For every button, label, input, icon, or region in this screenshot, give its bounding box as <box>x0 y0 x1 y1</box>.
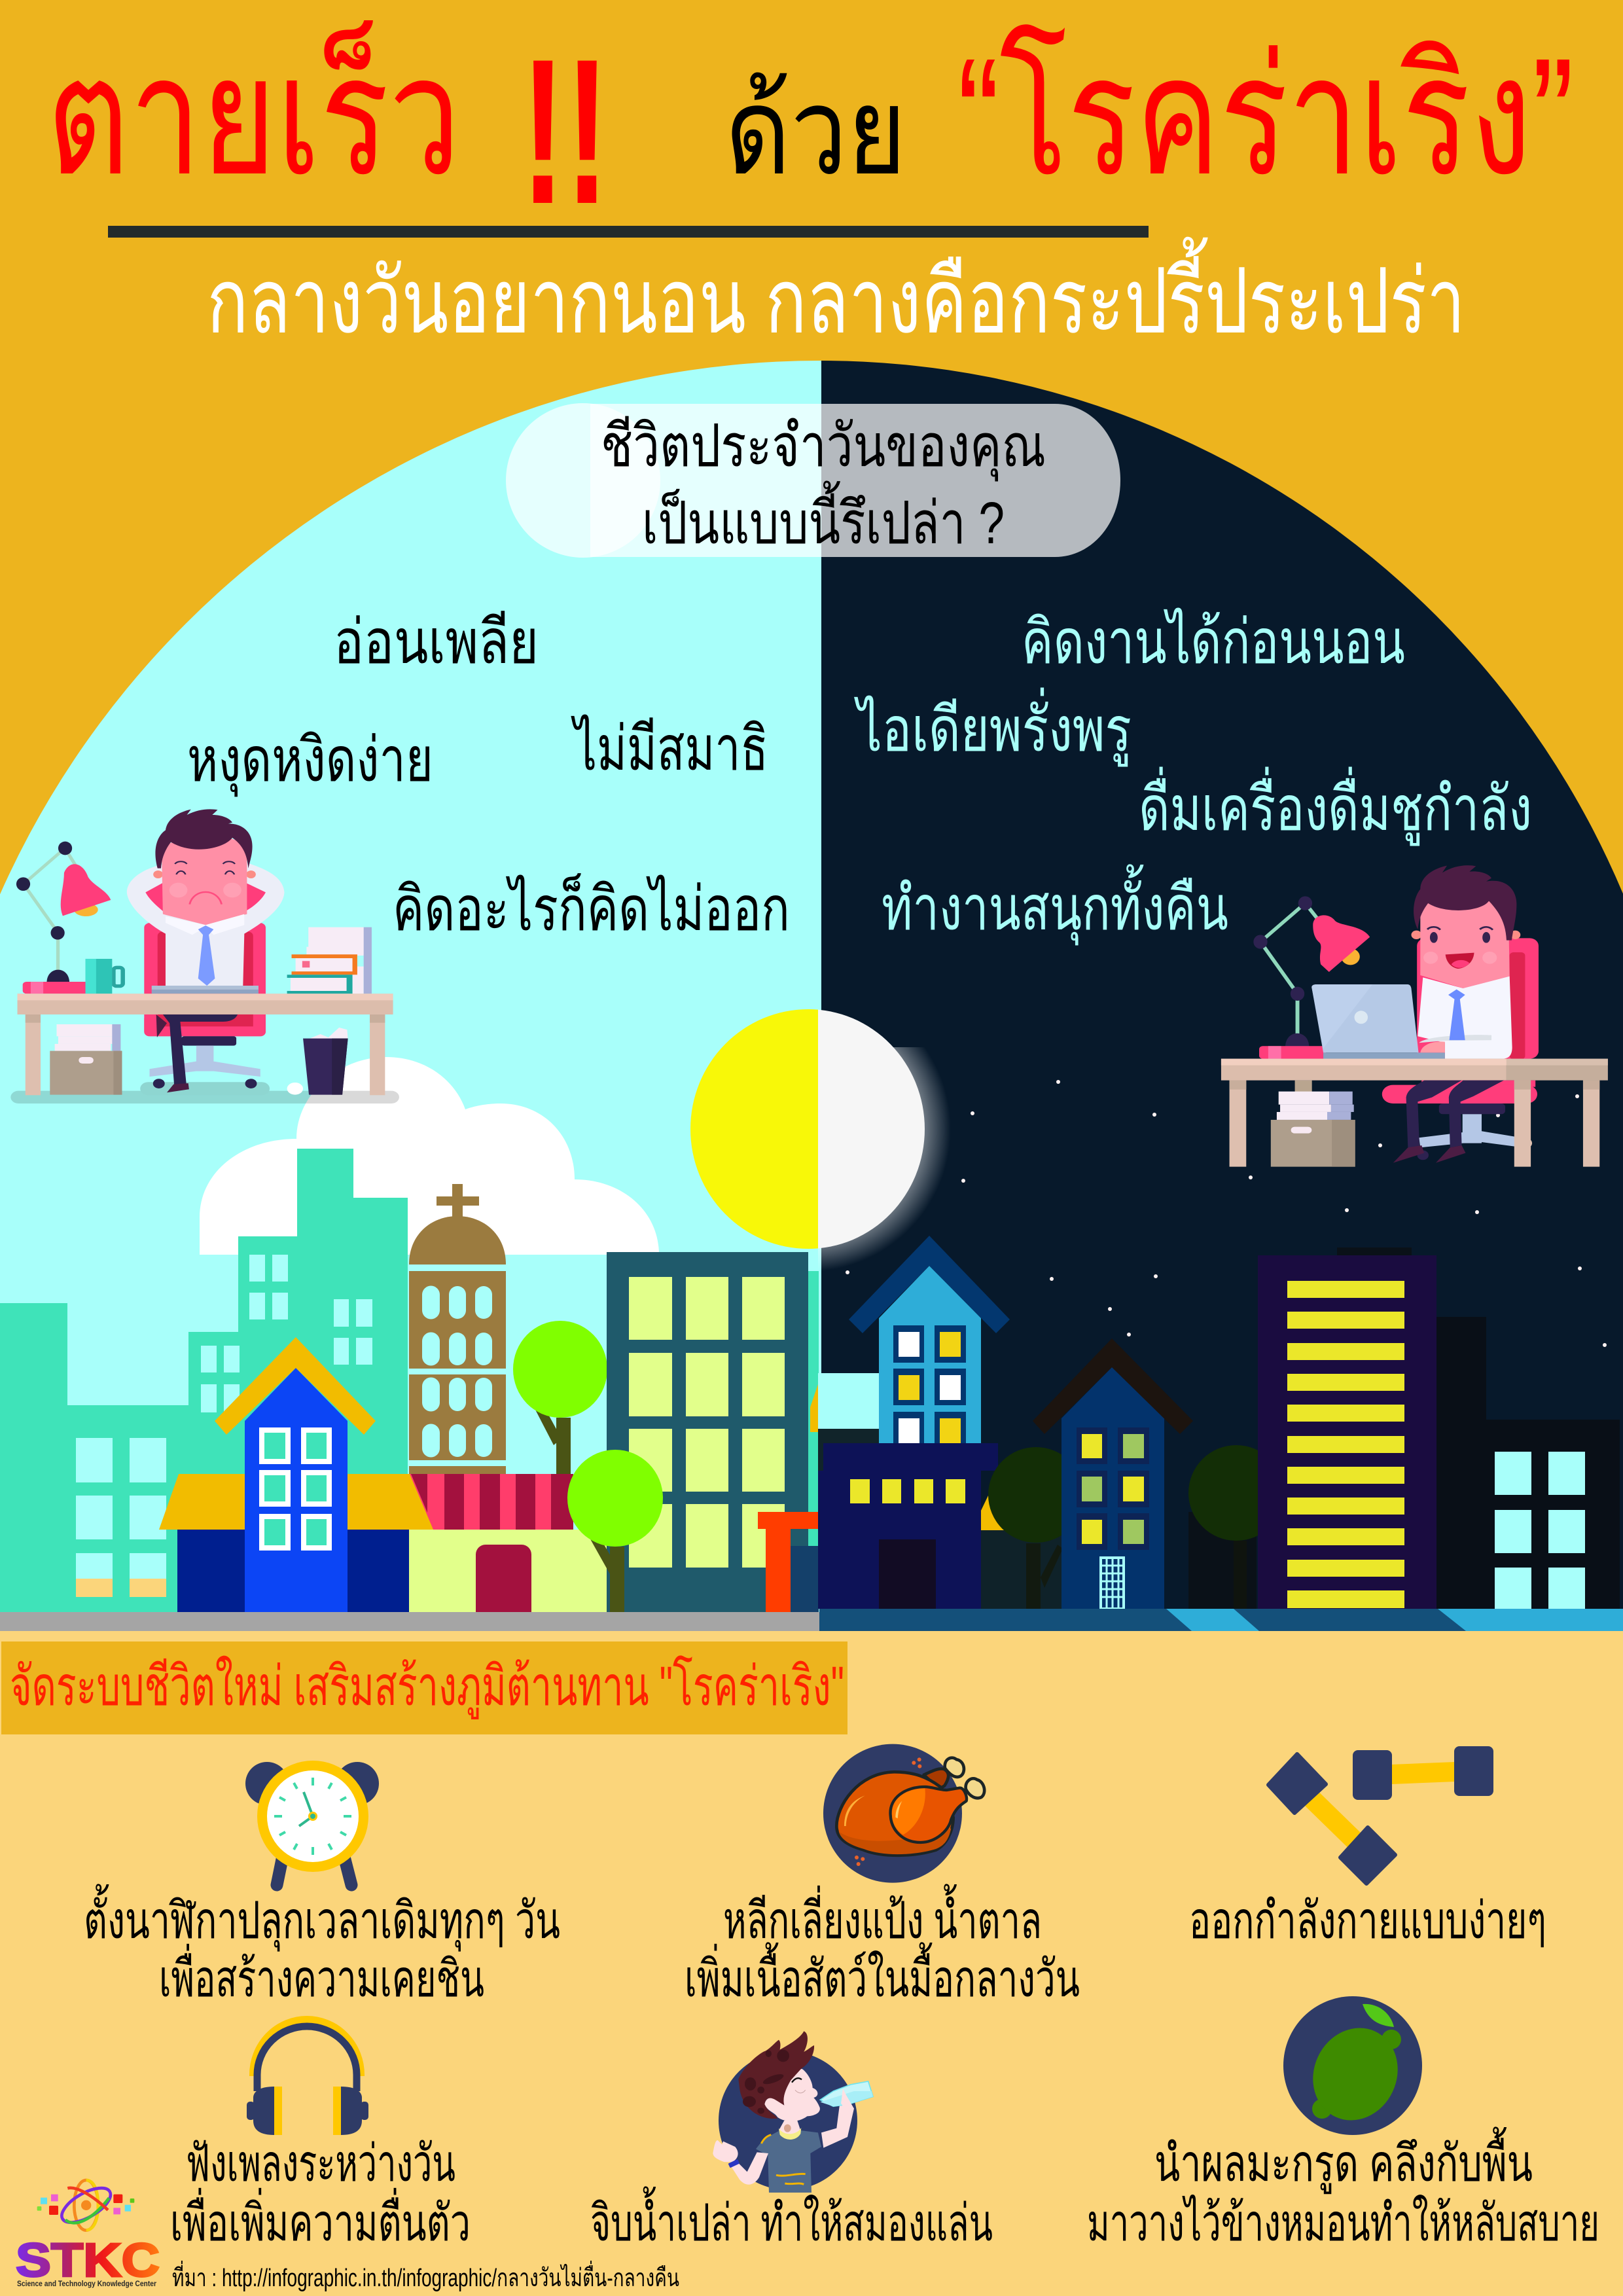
text: alarm tip <box>84 1884 560 2007</box>
books and papers <box>287 927 372 994</box>
day symptoms text: คิดอะไรก็คิดไม่ออก <box>393 872 790 943</box>
heading text: solutions: จัดระบบชีวิตใหม่ เสริมสร้างภูมิต้านทาน "โรคร่าเริง" <box>10 1655 844 1719</box>
background: bottom pale yellow <box>0 1631 1623 2296</box>
title: ด้วย <box>725 65 906 200</box>
pill text <box>601 414 1046 556</box>
night symptoms text: คิดงานได้ก่อนนอน <box>1022 607 1405 676</box>
logo: STKC <box>16 2180 160 2288</box>
source line: ที่มา : http://infographic.in.th/infographic/กลางวันไม่ตื่น-กลางคืน <box>172 2261 679 2292</box>
tall block <box>1436 1317 1620 1609</box>
illustration: tired man at desk <box>10 809 399 1103</box>
icon: sun <box>690 1009 818 1249</box>
teal skyline <box>0 1149 408 1612</box>
night tree <box>988 1447 1084 1609</box>
mug <box>86 959 123 994</box>
icon: cloud <box>200 1057 659 1255</box>
desk lamp <box>16 842 111 994</box>
day symptoms text: อ่อนเพลีย <box>334 607 539 676</box>
background gap <box>818 1373 879 1429</box>
background: top orange <box>0 0 1623 1631</box>
day symptoms text <box>187 607 790 943</box>
blue house <box>159 1337 433 1612</box>
yellow striped tower <box>1258 1247 1436 1609</box>
text: alarm tip: เพื่อสร้างความเคยชิน <box>159 1944 484 2007</box>
title: !! <box>521 16 609 247</box>
title <box>46 16 1574 247</box>
desk <box>18 994 393 1095</box>
icon: dumbbells <box>1268 1746 1493 1884</box>
night symptoms text: ไอเดียพรั่งพรู <box>853 687 1132 767</box>
text: music tip: เพื่อเพิ่มความตื่นตัว <box>170 2188 471 2251</box>
pill text: ชีวิตประจำวันของคุณ <box>601 414 1046 482</box>
night stars <box>846 1080 1607 1347</box>
icon: kaffir lime <box>1283 1996 1422 2135</box>
shop <box>409 1474 607 1612</box>
trash bin <box>287 1028 348 1095</box>
title: ตายเร็ว <box>46 20 461 209</box>
church <box>409 1184 506 1474</box>
night tree <box>1188 1445 1284 1609</box>
text: lime tip <box>1087 2126 1599 2251</box>
night ground <box>819 1609 1623 1631</box>
day symptoms text: ไม่มีสมาธิ <box>571 714 768 783</box>
logo: STKC: STKC <box>16 2234 160 2287</box>
teal office tower <box>607 1252 819 1612</box>
night city buildings <box>818 1236 1620 1609</box>
day half background <box>0 327 821 1631</box>
night half background <box>821 327 1623 1631</box>
house with blue wall <box>849 1236 1010 1443</box>
text: food tip <box>685 1884 1080 2007</box>
day ground <box>0 1612 819 1631</box>
text: water tip: จิบน้ำเปล่า ทำให้สมองแล่น <box>590 2186 993 2251</box>
night symptoms text: ทำงานสนุกทั้งคืน <box>882 864 1228 946</box>
box and papers <box>50 1024 122 1095</box>
icon: roast chicken <box>823 1744 984 1883</box>
dark blue house <box>1033 1338 1193 1609</box>
day city buildings <box>0 1149 819 1612</box>
text: alarm tip: ตั้งนาฬิกาปลุกเวลาเดิมทุกๆ วัน <box>84 1884 560 1952</box>
day symptoms text: หงุดหงิดง่าย <box>187 725 433 797</box>
heading band: solutions <box>1 1641 847 1734</box>
panel: day and night dome <box>0 327 1623 1631</box>
navy building <box>818 1443 998 1609</box>
tree <box>567 1450 663 1612</box>
title rule <box>108 226 1149 238</box>
night symptoms text <box>853 607 1532 946</box>
text: food tip: หลีกเลี่ยงแป้ง น้ำตาล <box>723 1884 1042 1949</box>
text: music tip: ฟังเพลงระหว่างวัน <box>186 2134 455 2192</box>
icon: boy drinking water <box>713 2031 873 2193</box>
pill: question <box>506 403 1120 558</box>
icon: alarm clock <box>245 1761 379 1885</box>
desk <box>1221 1059 1608 1167</box>
desk lamp <box>1253 896 1370 1059</box>
icon: moon <box>818 1009 949 1268</box>
tree <box>513 1321 607 1474</box>
illustration: happy man at laptop <box>1221 865 1608 1167</box>
logo: STKC: Science and Technology Knowledge Center <box>17 2279 156 2288</box>
text: music tip <box>170 2134 471 2251</box>
box and papers <box>1271 1092 1355 1167</box>
laptop <box>1311 984 1445 1059</box>
text: food tip: เพิ่มเนื้อสัตว์ในมื้อกลางวัน <box>685 1942 1080 2007</box>
icon: headphones <box>247 2020 368 2135</box>
pill text: เป็นแบบนี้รึเปล่า ? <box>642 481 1005 556</box>
